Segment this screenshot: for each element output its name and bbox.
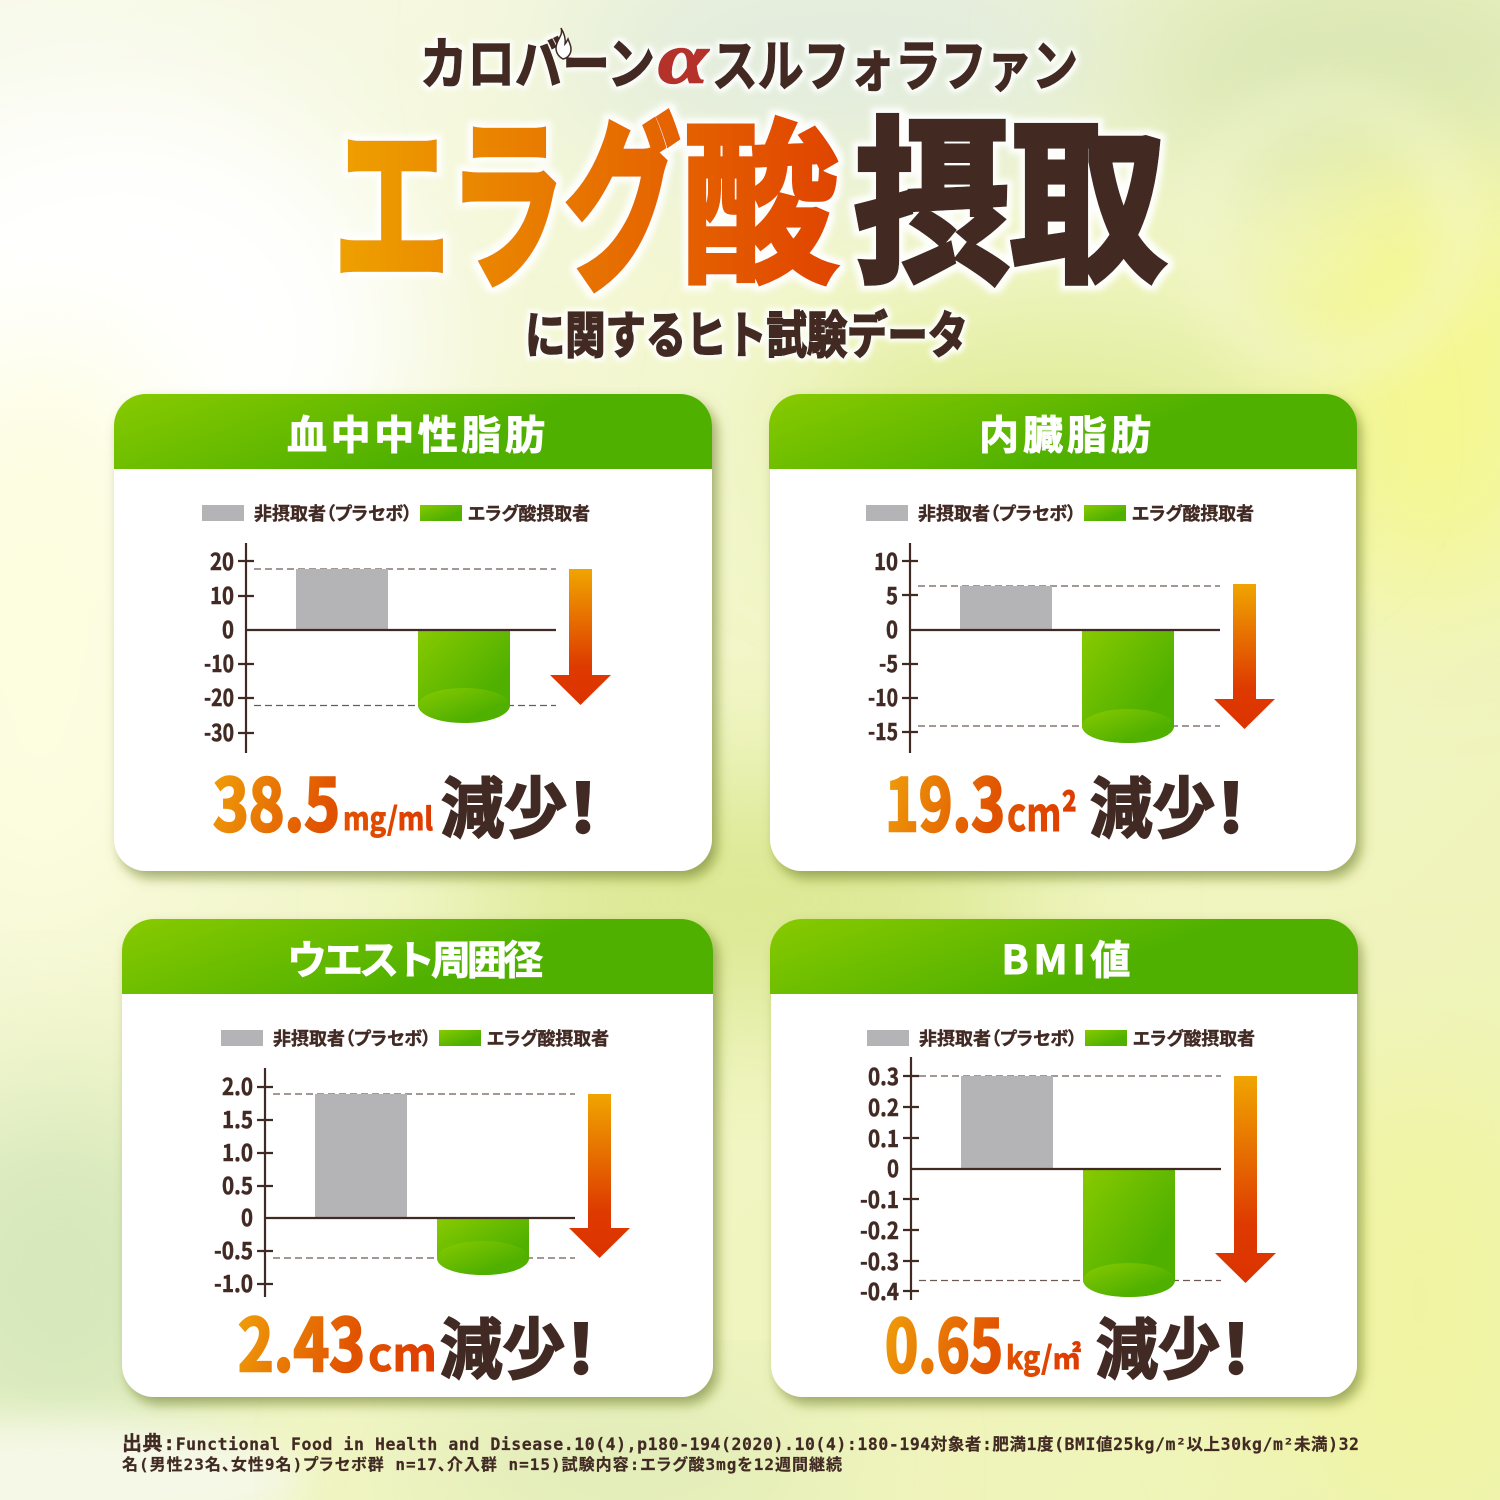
bar chart [204, 543, 556, 753]
result: ！ [1203, 1297, 1269, 1393]
bar chart [214, 1068, 575, 1299]
brand name: α [658, 19, 709, 99]
bar chart: -30 [204, 714, 234, 748]
legend: 非摂取者（プラセボ） [918, 500, 1076, 526]
result: 2.43 [238, 1287, 365, 1392]
result: cm [368, 1319, 437, 1385]
bar chart: 0 [222, 611, 234, 645]
result: 減少 [1090, 756, 1215, 852]
result: 減少 [1096, 1297, 1220, 1393]
source note [122, 1431, 1359, 1474]
header bar [114, 394, 712, 469]
card [770, 394, 1356, 871]
main heading: ellagic acid: 酸 [682, 64, 838, 319]
bar chart: -0.2 [860, 1212, 899, 1246]
result: 減少 [441, 756, 567, 852]
panel: waist circumference [122, 919, 713, 1397]
card [114, 394, 712, 871]
bar chart: -0.3 [860, 1243, 899, 1277]
result [885, 1288, 1269, 1393]
brand name: スルフォラファン [712, 22, 1078, 103]
result: ！ [550, 756, 616, 852]
bar chart: 1.5 [222, 1101, 253, 1135]
legend [867, 1025, 1255, 1051]
legend: 非摂取者（プラセボ） [254, 500, 412, 526]
subtitle: に関するヒト試験データ [525, 296, 968, 368]
legend: エラグ酸摂取者 [1133, 1025, 1255, 1051]
bar chart: 20 [210, 543, 234, 577]
card [122, 919, 713, 1397]
brand name: カロバーン [420, 20, 655, 101]
brand name [420, 19, 1078, 103]
panel: BMI [770, 919, 1358, 1397]
legend: エラグ酸摂取者 [468, 500, 590, 526]
panel: visceral fat [769, 394, 1357, 871]
bar chart: -0.1 [860, 1181, 899, 1215]
panel: blood neutral fat [114, 394, 712, 871]
main heading: ellagic acid: エラグ [334, 57, 680, 327]
bar chart: 0.3 [868, 1058, 899, 1092]
legend: 非摂取者（プラセボ） [919, 1025, 1077, 1051]
bar chart: -10 [868, 679, 898, 713]
bar chart: 0.2 [868, 1089, 899, 1123]
bar chart: 5 [886, 577, 898, 611]
bar chart: -1.0 [214, 1265, 253, 1299]
legend: エラグ酸摂取者 [1132, 500, 1254, 526]
legend [866, 500, 1254, 526]
bar chart: -20 [204, 679, 234, 713]
bar chart [860, 1057, 1221, 1307]
result: ！ [1198, 756, 1264, 852]
header bar [122, 919, 713, 994]
heading: 内臓脂肪 [979, 403, 1151, 461]
bar chart: 0 [886, 611, 898, 645]
bar chart: 0.5 [222, 1167, 253, 1201]
bar chart: 0.1 [868, 1120, 899, 1154]
result: mg/ml [343, 794, 433, 839]
result: ！ [548, 1297, 614, 1393]
arrow [1214, 584, 1275, 729]
bar chart [868, 543, 1220, 753]
bar chart: 1.0 [222, 1134, 253, 1168]
heading: BMI値 [1002, 928, 1130, 986]
legend [221, 1025, 609, 1051]
result: 減少 [440, 1297, 565, 1393]
bar chart: 10 [874, 543, 898, 577]
result: 19.3 [885, 747, 1005, 852]
legend: エラグ酸摂取者 [487, 1025, 609, 1051]
result: cm² [1007, 779, 1077, 845]
result: kg/㎡ [1006, 1333, 1081, 1378]
bar chart: -0.4 [860, 1273, 899, 1307]
bar chart: -0.5 [214, 1232, 253, 1266]
bar chart: 0 [887, 1150, 899, 1184]
bar chart: 0 [241, 1199, 253, 1233]
result [213, 747, 616, 852]
source note: 名(男性23名、女性9名)プラセボ群 n=17、介入群 n=15)試験内容:エラグ酸3mgを12週間継続 [122, 1455, 842, 1474]
arrow [1215, 1076, 1276, 1283]
result: 0.65 [885, 1288, 1003, 1393]
bar chart: -5 [879, 645, 898, 679]
header bar [770, 919, 1358, 994]
arrow [550, 569, 611, 705]
arrow [569, 1094, 630, 1258]
source note: 出典:Functional Food in Health and Disease.10(4),p180-194(2020).10(4):180-194対象者:肥満1度(BMI値25kg/m²以上30kg/m²未満)32 [122, 1431, 1359, 1455]
title block [334, 19, 1166, 368]
result: 38.5 [213, 747, 340, 852]
bar chart: 10 [210, 577, 234, 611]
card [771, 919, 1357, 1397]
bar chart: 2.0 [222, 1068, 253, 1102]
legend: 非摂取者（プラセボ） [273, 1025, 431, 1051]
heading: 血中中性脂肪 [287, 403, 545, 461]
result [238, 1287, 614, 1393]
main heading: intake: 摂取 [854, 62, 1166, 319]
icon: flame [556, 28, 571, 59]
header bar [769, 394, 1357, 469]
result [885, 747, 1264, 852]
heading: ウエスト周囲径 [287, 928, 543, 986]
bar chart: -10 [204, 645, 234, 679]
bar chart: -15 [868, 713, 898, 747]
legend [202, 500, 590, 526]
